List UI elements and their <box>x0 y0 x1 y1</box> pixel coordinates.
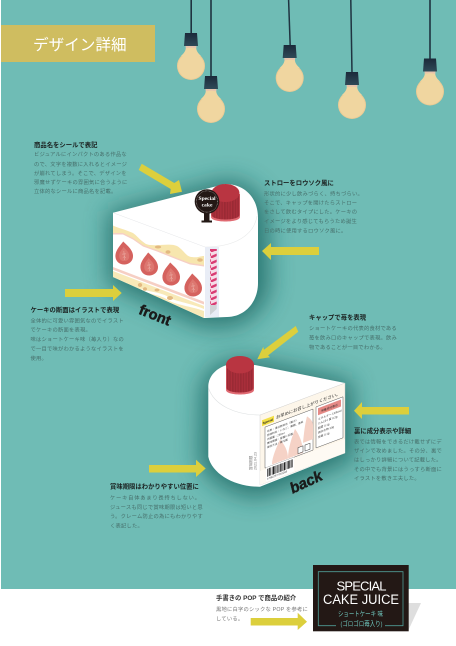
text block: strawberry cap: キャップで苺を表現 <box>309 312 367 321</box>
text block: strawberry cap <box>309 312 397 351</box>
bulb 5 <box>416 0 444 106</box>
cake body <box>208 365 345 487</box>
POP board: CAKE JUICE <box>323 592 399 607</box>
product info label <box>260 383 345 485</box>
bulb 3 <box>276 0 304 92</box>
text block: cross section illustration: で一目で味がわかるようなイラストを <box>30 345 124 353</box>
product info label: 脂質 0.1g <box>318 422 330 430</box>
cake cross section: lower sponge <box>113 267 204 318</box>
arrow: to expiry date <box>149 460 206 477</box>
text block: expiry date: ジュースも同じで賞味期限は短いと思 <box>110 503 203 511</box>
text block: product name sticker: ビジュアルにインパクトのある作品な <box>34 150 127 158</box>
text block: product name sticker: 商品名をシールで表記 <box>34 140 98 149</box>
candle straw <box>205 247 219 317</box>
text block: product name sticker <box>34 140 127 195</box>
product info label: エネルギー 120kcal <box>318 408 342 421</box>
text block: cross section illustration: ケーキの断面はイラストで表現 <box>30 305 120 314</box>
recycle marks <box>298 443 310 454</box>
strawberries <box>114 241 203 297</box>
expiry date print: 2021.04.23 <box>254 452 258 470</box>
red cap <box>226 356 254 394</box>
nutrition box <box>316 397 343 448</box>
text block: product name sticker: ので、文字を複数に入れるとイメージ <box>34 160 127 168</box>
text block: ingredient details: 表では情報をできるだけ載せずにデ <box>354 438 442 446</box>
title band <box>1 25 155 62</box>
product info label: 原材料名：いちご、果糖、香料 <box>267 420 304 437</box>
back cake illustration <box>208 356 345 487</box>
cake body <box>113 184 258 318</box>
red cap <box>211 184 240 222</box>
bulb 4 <box>338 0 366 119</box>
product info label: 炭水化物 30g <box>318 425 334 435</box>
text block: candle straw: イメージをより感じてもらうため誕生 <box>264 217 357 225</box>
sticker: Special cake <box>195 189 219 222</box>
product info label: 栄養成分表示 <box>321 402 338 413</box>
text block: handwritten POP <box>216 593 308 622</box>
product info label: 賞味期限：容器に記載 <box>267 432 293 445</box>
text block: strawberry cap: ショートケーキの代表的食材である <box>309 324 397 332</box>
arrow: to back cap <box>257 326 298 359</box>
text block: cross section illustration <box>30 305 124 362</box>
product info label: 内容量：280ml <box>267 431 285 441</box>
text block: expiry date: ケーキ自体あまり長持ちしない。 <box>110 494 201 502</box>
text block: cross section illustration: でケーキの断面を表現。 <box>30 326 91 334</box>
product info label: Special <box>263 417 273 425</box>
text block: cross section illustration: 使用。 <box>30 354 47 362</box>
text block: expiry date: 賞味期限はわかりやすい位置に <box>110 482 199 490</box>
text block: product name sticker: 立体的なシールに商品名を記載。 <box>34 187 116 195</box>
expiry date print: 賞味期限 <box>248 455 253 470</box>
text block: cross section illustration: 味はショートケーキ味（苺入り）なの <box>30 335 124 343</box>
shadow: front cake <box>108 180 270 327</box>
ingredients box <box>265 409 313 468</box>
text block: handwritten POP: している。 <box>216 615 243 622</box>
text block: expiry date: く表記した。 <box>110 521 143 529</box>
arrow: to POP board <box>251 613 307 630</box>
hanging light bulbs <box>177 0 444 123</box>
text block: ingredient details: ザインで攻めました。その分、裏で <box>354 447 442 455</box>
text block: ingredient details <box>354 426 442 482</box>
text block: ingredient details: その中でも背景にはうっすら断面に <box>354 465 442 473</box>
arrow: to sticker <box>139 164 182 194</box>
arrow: to back label <box>354 402 409 419</box>
arrow: to cross section <box>65 285 122 301</box>
text block: candle straw: そこで、キャップを開けたらストロー <box>264 199 357 206</box>
product info label: 食塩 0.1g <box>318 431 330 439</box>
caution heading: お早めにお召し上がりください。 <box>276 390 340 421</box>
product info label: 保存方法：要冷蔵 <box>267 438 288 449</box>
bulb 1 <box>177 0 205 80</box>
text block: handwritten POP: 黒地に白字のシックな POP を参考に <box>216 605 308 613</box>
title band: デザイン詳細 <box>33 35 127 54</box>
POP board <box>313 565 421 631</box>
POP board: SPECIAL <box>336 578 386 594</box>
text block: product name sticker: 邪魔せずケーキの雰囲気に合うように <box>34 178 127 186</box>
text block: candle straw: をさして飲むタイプにした。ケーキの <box>264 208 357 216</box>
product info label: 名称：清涼飲料水（果汁） <box>267 418 298 433</box>
text block: expiry date <box>110 482 203 529</box>
yellow tag <box>262 416 274 426</box>
POP board: ショートケーキ 味 <box>338 609 383 618</box>
product info label: たんぱく質 0.2g <box>318 414 338 426</box>
expiry date print <box>248 452 258 470</box>
shadow: back cake <box>199 360 354 498</box>
arrow: to candle straw <box>262 243 319 260</box>
text block: candle straw: 形状的に少し飲みづらく、持ちづらい。 <box>264 189 363 197</box>
sticker: Special cake: cake <box>202 202 213 208</box>
text block: ingredient details: イラストを敷き工夫した。 <box>354 474 420 482</box>
label: back: back <box>287 467 326 497</box>
text block: strawberry cap: 物であることが一目でわかる。 <box>309 343 386 351</box>
text block: handwritten POP: 手書きの POP で商品の紹介 <box>216 593 297 602</box>
label: front: front <box>136 302 173 330</box>
POP board: (ゴロゴロ苺入り) <box>340 619 382 628</box>
sticker: Special cake: Special <box>198 196 216 202</box>
barcode: 4 582257 010265 <box>267 469 288 481</box>
front cake illustration <box>113 184 258 318</box>
text block: product name sticker: が崩れてしまう。そこで、デザインを <box>34 169 127 177</box>
text block: candle straw <box>264 178 363 234</box>
text block: candle straw: 日の時に使用するロウソク風に。 <box>264 226 346 234</box>
text block: strawberry cap: 苺を飲み口のキャップで表現。飲み <box>309 333 397 341</box>
text block: candle straw: ストローをロウソク風に <box>264 178 334 187</box>
text block: ingredient details: はしっかり詳細について記載した。 <box>354 456 442 464</box>
cake cross section: upper layer <box>113 226 204 266</box>
bulb 2 <box>197 0 225 123</box>
text block: expiry date: う。クレーム防止の為にもわかりやす <box>110 512 203 520</box>
text block: cross section illustration: 全体的に可愛い雰囲気なのでイラスト <box>30 316 124 324</box>
text block: ingredient details: 裏に成分表示や詳細 <box>354 426 411 435</box>
